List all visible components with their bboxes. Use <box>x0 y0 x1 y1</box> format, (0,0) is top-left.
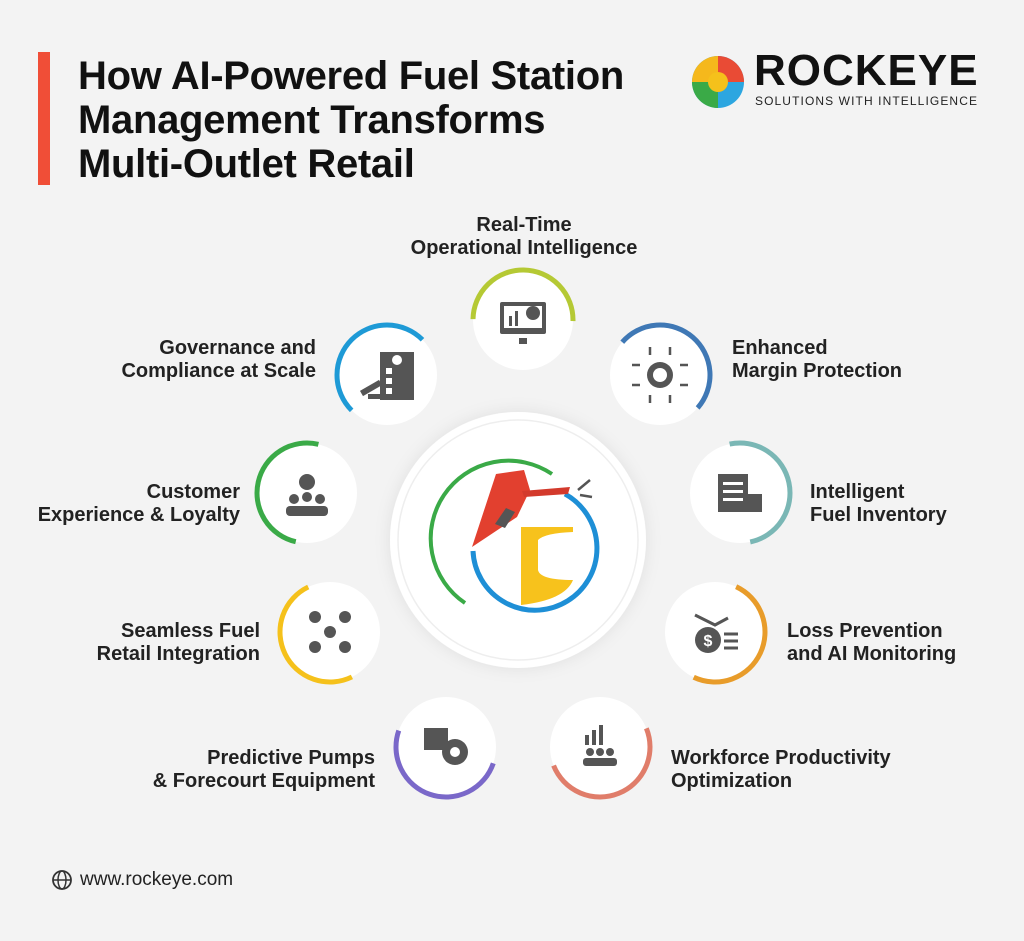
diagram: $ <box>704 633 713 650</box>
label: seamless <box>97 620 260 665</box>
label: real-time: Operational Intelligence <box>411 237 637 259</box>
logo: SOLUTIONS WITH INTELLIGENCE <box>755 94 978 108</box>
label: seamless: Seamless Fuel <box>121 620 260 642</box>
label: governance: Compliance at Scale <box>121 360 316 382</box>
label: customer: Customer <box>147 481 240 503</box>
label: loss: Loss Prevention <box>787 620 943 642</box>
title bar accent <box>38 52 50 185</box>
label: seamless: Retail Integration <box>97 643 260 665</box>
icon: globe <box>53 871 71 889</box>
label: enhanced: Margin Protection <box>732 360 902 382</box>
label: governance <box>121 337 316 382</box>
label: intelligent <box>810 481 947 526</box>
footer url: www.rockeye.com <box>80 869 233 890</box>
label: customer <box>38 481 240 526</box>
label: real-time <box>411 214 637 259</box>
logo: ROCKEYE <box>754 46 979 95</box>
label: loss: and AI Monitoring <box>787 643 956 665</box>
logo <box>692 46 979 108</box>
label: real-time: Real-Time <box>476 214 572 236</box>
label: governance: Governance and <box>159 337 316 359</box>
nodes <box>472 269 574 371</box>
label: enhanced: Enhanced <box>732 337 828 359</box>
title: Management Transforms <box>78 98 545 142</box>
label: customer: Experience & Loyalty <box>38 504 240 526</box>
title: How AI-Powered Fuel Station <box>78 54 624 98</box>
label: intelligent: Fuel Inventory <box>810 504 947 526</box>
title <box>78 54 624 186</box>
label: intelligent: Intelligent <box>810 481 904 503</box>
label: predictive: Predictive Pumps <box>207 747 375 769</box>
label: workforce: Workforce Productivity <box>671 747 891 769</box>
title: Multi-Outlet Retail <box>78 142 415 186</box>
label: enhanced <box>732 337 902 382</box>
label: loss <box>787 620 956 665</box>
label: workforce <box>671 747 891 792</box>
label: predictive: & Forecourt Equipment <box>153 770 375 792</box>
center circle <box>390 412 646 668</box>
label: predictive <box>153 747 375 792</box>
label: workforce: Optimization <box>671 770 792 792</box>
